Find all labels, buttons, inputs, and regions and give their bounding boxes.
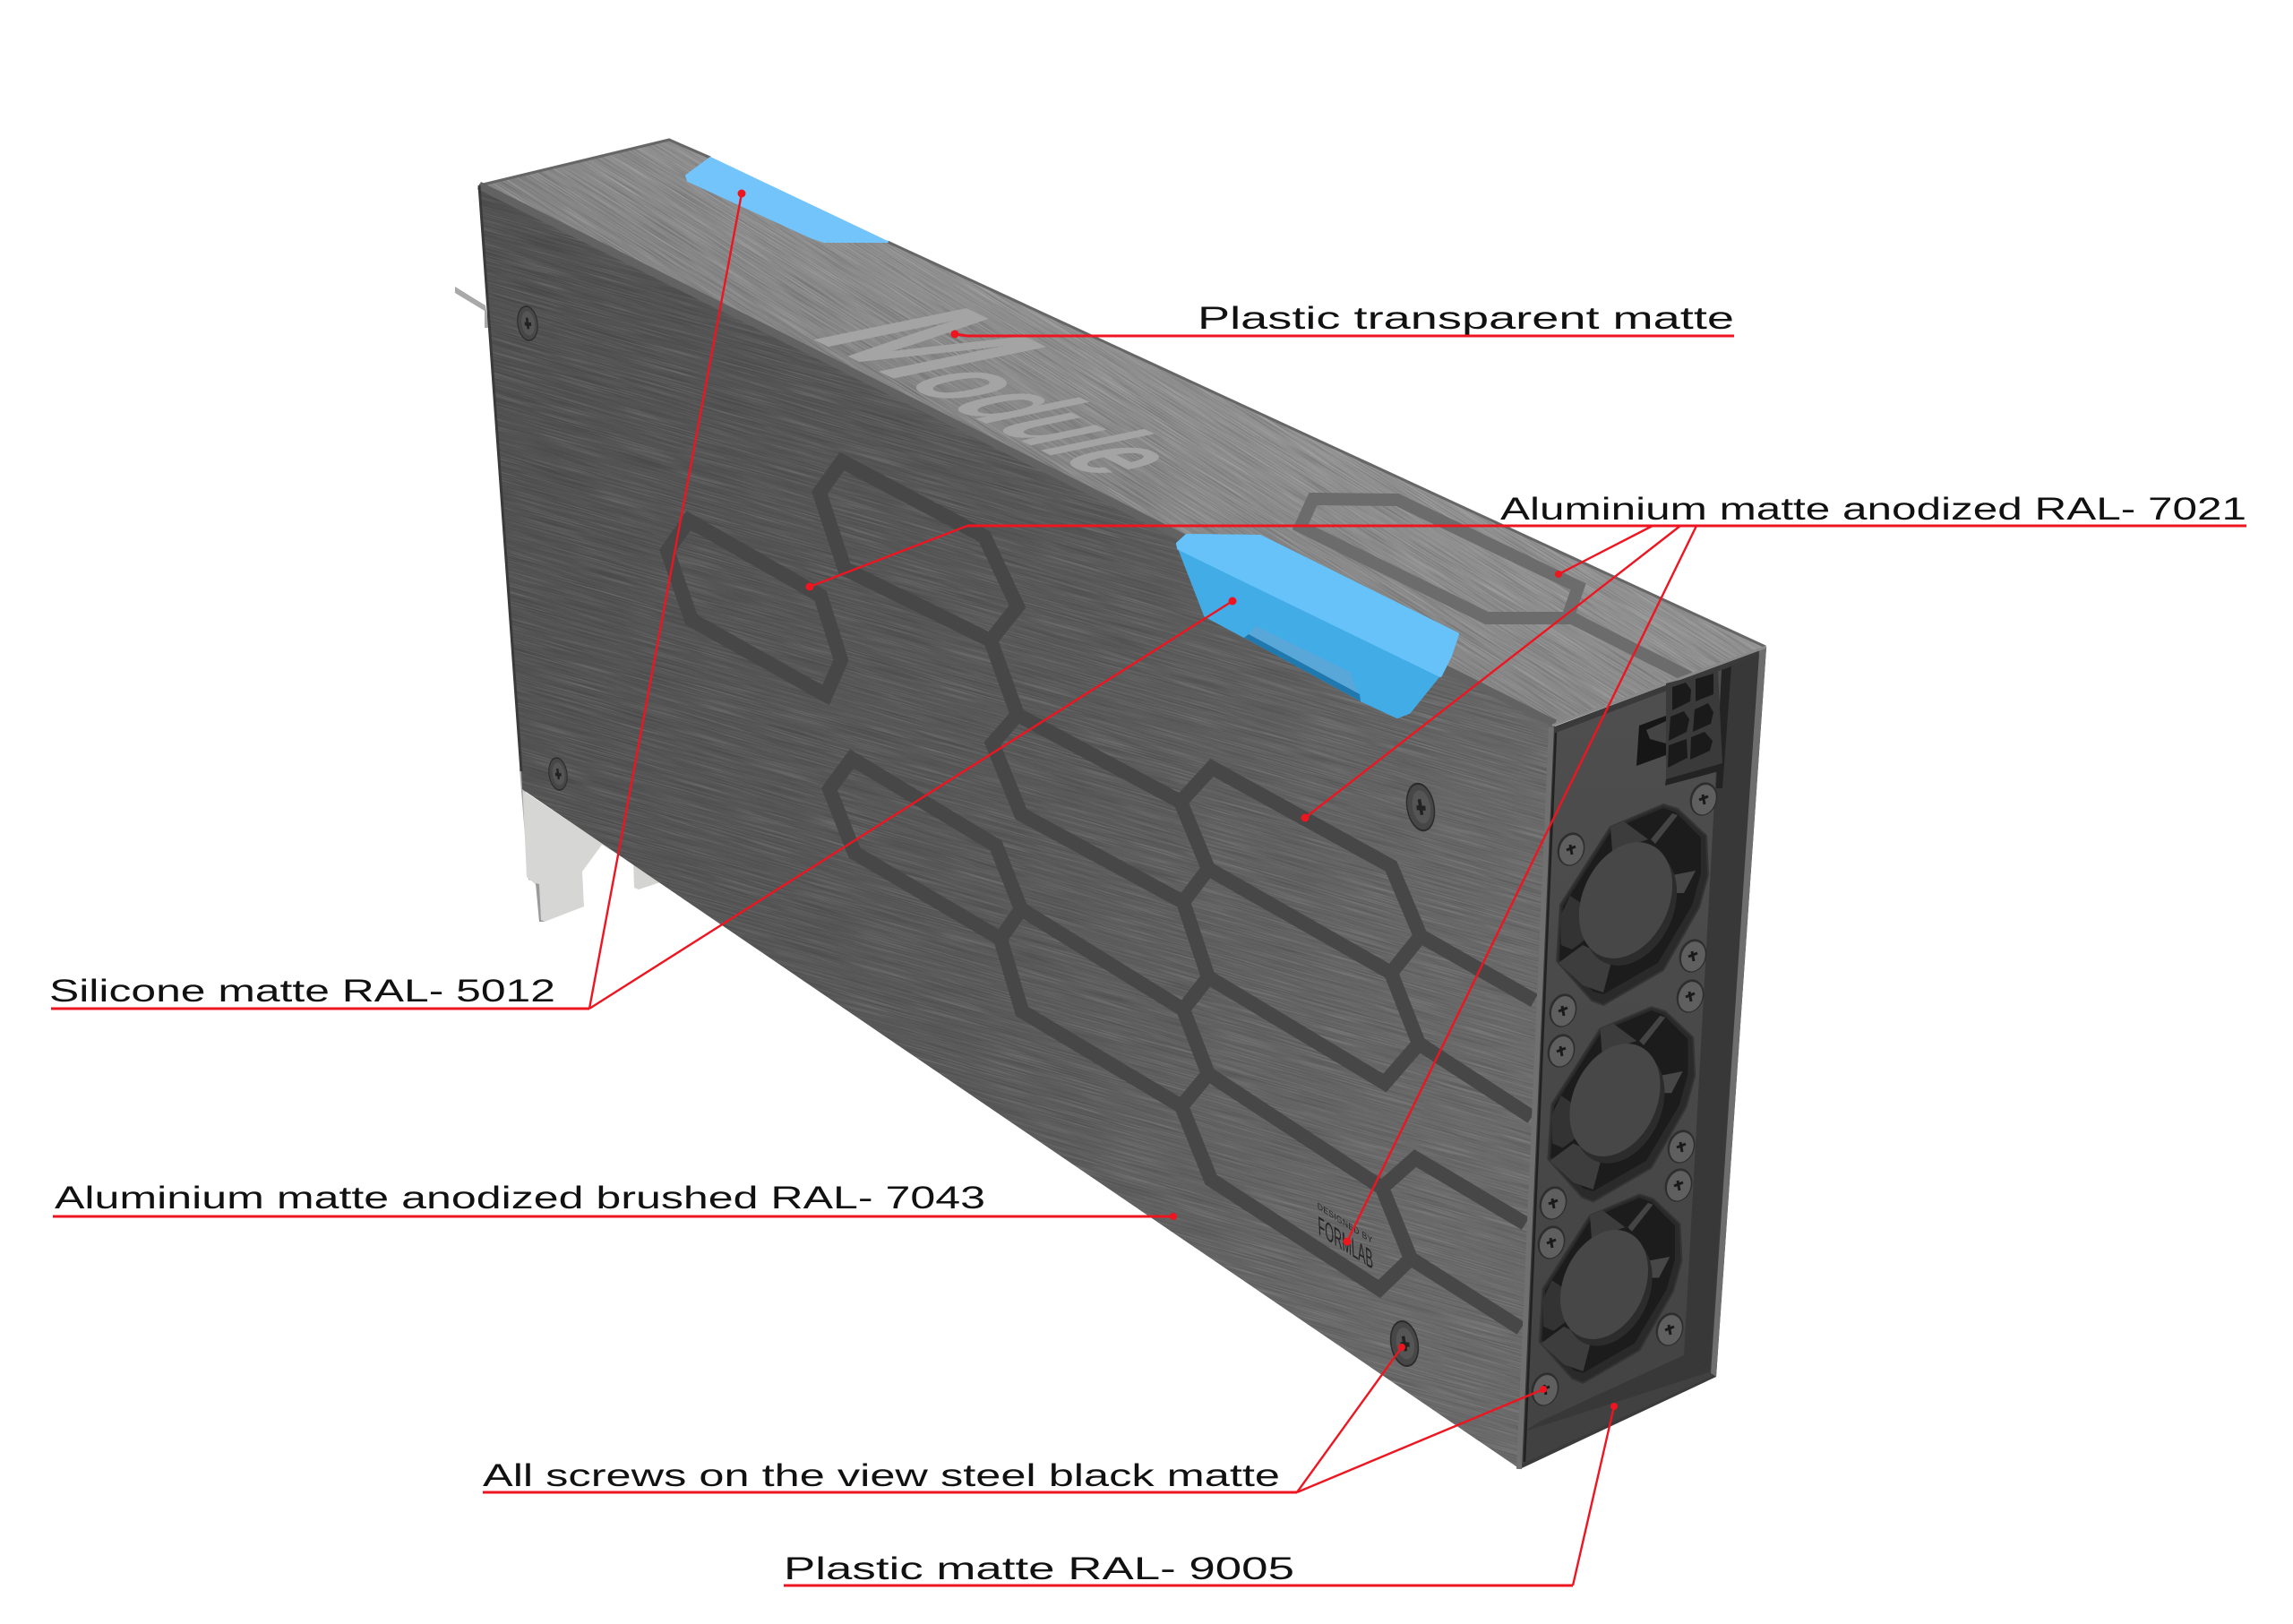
side face: brushed aluminium — [477, 182, 1557, 1467]
silicone bumper: large blue — [1178, 536, 1457, 717]
maker mark: designed by formlab — [1318, 1201, 1374, 1276]
front screws — [1527, 778, 1722, 1410]
fan 2 — [1548, 1007, 1695, 1201]
fan 3 — [1540, 1194, 1681, 1383]
callout: plastic transparent matte: Plastic transparent matte — [1198, 301, 1734, 336]
callout: plastic transparent matte — [951, 301, 1734, 339]
top groove hexagon — [1301, 499, 1689, 677]
callout: aluminium matte anodized RAL 7021: Aluminium matte anodized RAL- 7021 — [1500, 492, 2246, 527]
power connector — [1636, 670, 1722, 786]
callout: aluminium matte anodized brushed RAL 7043 — [53, 1181, 1177, 1220]
callout: plastic matte RAL 9005 — [784, 1403, 1618, 1586]
bracket: steel PCI bracket at rear — [455, 287, 663, 922]
callout: aluminium matte anodized RAL 7021 — [806, 492, 2246, 1245]
callout: plastic matte RAL 9005: Plastic matte RAL- 9005 — [784, 1551, 1294, 1586]
maker mark: designed by formlab: DESIGNED BY — [1318, 1201, 1373, 1247]
enclosure: brushed aluminium shell — [477, 138, 1766, 1469]
front face: fan plate — [1519, 647, 1766, 1469]
top face: brushed aluminium — [478, 138, 1766, 724]
callout: all screws steel black matte — [483, 1344, 1547, 1493]
maker mark: designed by formlab: FORMLAB — [1318, 1211, 1374, 1276]
callout: all screws steel black matte: All screws on the view steel black matte — [483, 1458, 1280, 1493]
side screws — [515, 305, 1438, 1368]
silicone bumper: small blue rear — [686, 158, 888, 242]
callout: silicone matte RAL 5012: Silicone matte RAL- 5012 — [49, 974, 555, 1009]
fan 1 — [1557, 804, 1708, 1005]
callout: silicone matte RAL 5012 — [49, 190, 1236, 1009]
side hexagon grooves — [667, 461, 1534, 1328]
callout: aluminium matte anodized brushed RAL 7043: Aluminium matte anodized brushed RAL- 7043 — [55, 1181, 985, 1216]
logo on top face: Module — [759, 295, 1297, 487]
